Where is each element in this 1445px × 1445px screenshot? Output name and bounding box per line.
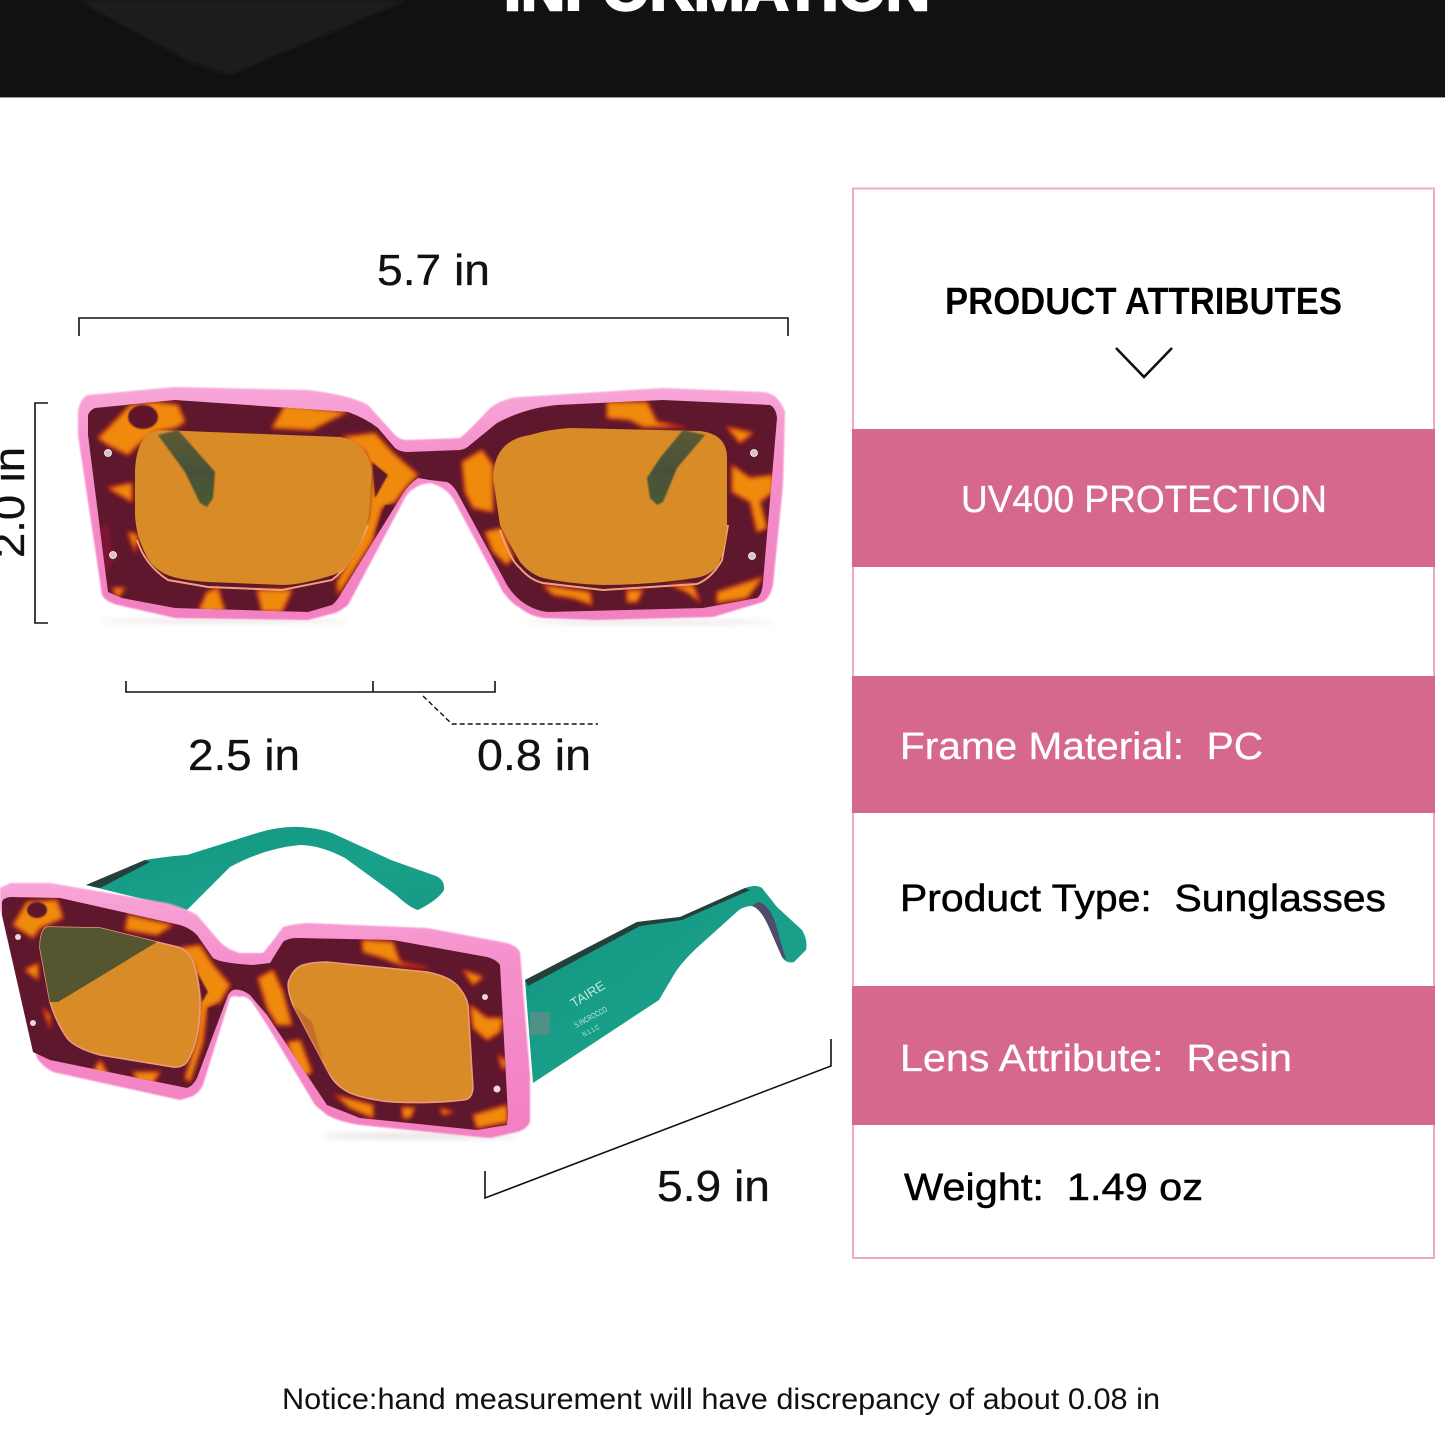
temple logo text (568, 978, 609, 1039)
header banner (0, 0, 1445, 98)
label: 5.7 in: 5.7 in (377, 246, 490, 295)
footnote: Notice:hand measurement will have discrepancy of about 0.08 in (282, 1383, 1160, 1416)
temple logo text: N.1.1.C (582, 1024, 601, 1039)
front frame tortoise shell (80, 395, 790, 620)
label: 5.9 in: 5.9 in (657, 1162, 770, 1211)
temple logo text: TAIRE (568, 978, 608, 1011)
front left lens (135, 430, 372, 585)
bar: lens attribute (852, 986, 1435, 1125)
front frame rivets (104, 450, 758, 560)
bar: frame material: Frame Material: PC (900, 726, 1263, 768)
dimension: total width bracket (79, 246, 788, 336)
reflection on angled left lens (40, 927, 157, 1002)
bar: UV400 protection (852, 429, 1435, 567)
near temple arm (525, 886, 806, 1083)
angled frame pink rim (0, 883, 530, 1138)
angled right lens (288, 962, 473, 1103)
angled view sunglasses (0, 827, 806, 1139)
row: weight: Weight: 1.49 oz (904, 1167, 1203, 1209)
bar: frame material (852, 676, 1435, 813)
front view sunglasses (78, 387, 790, 624)
label: 0.8 in: 0.8 in (477, 731, 591, 780)
front left lens rim line (137, 525, 368, 590)
angled left lens (40, 927, 200, 1067)
label: 2.5 in: 2.5 in (188, 731, 300, 780)
front right lens rim line (500, 525, 728, 590)
temple visible through left lens (158, 430, 215, 507)
panel heading: PRODUCT ATTRIBUTES (945, 281, 1342, 323)
bar: UV400 protection: UV400 PROTECTION (961, 479, 1327, 521)
temple logo text: S.INCROCCO (573, 1005, 609, 1030)
bar: lens attribute: Lens Attribute: Resin (900, 1038, 1292, 1080)
angled frame rivets (15, 934, 500, 1092)
icon: chevron down (1116, 348, 1172, 377)
angled frame tortoise shell (0, 890, 530, 1135)
temple visible through right lens (647, 430, 705, 505)
front right lens (493, 428, 727, 585)
temple hinge (530, 1012, 550, 1035)
dimension: lens width and bridge width bracket (126, 681, 598, 780)
dimension: frame height bracket (0, 403, 48, 623)
dashed leader line (423, 696, 598, 724)
far temple arm (86, 827, 444, 910)
dimension: temple length bracket (485, 1039, 831, 1211)
row: product type: Product Type: Sunglasses (900, 878, 1386, 920)
front frame pink rim (78, 387, 785, 620)
panel: product attributes (852, 188, 1435, 1258)
